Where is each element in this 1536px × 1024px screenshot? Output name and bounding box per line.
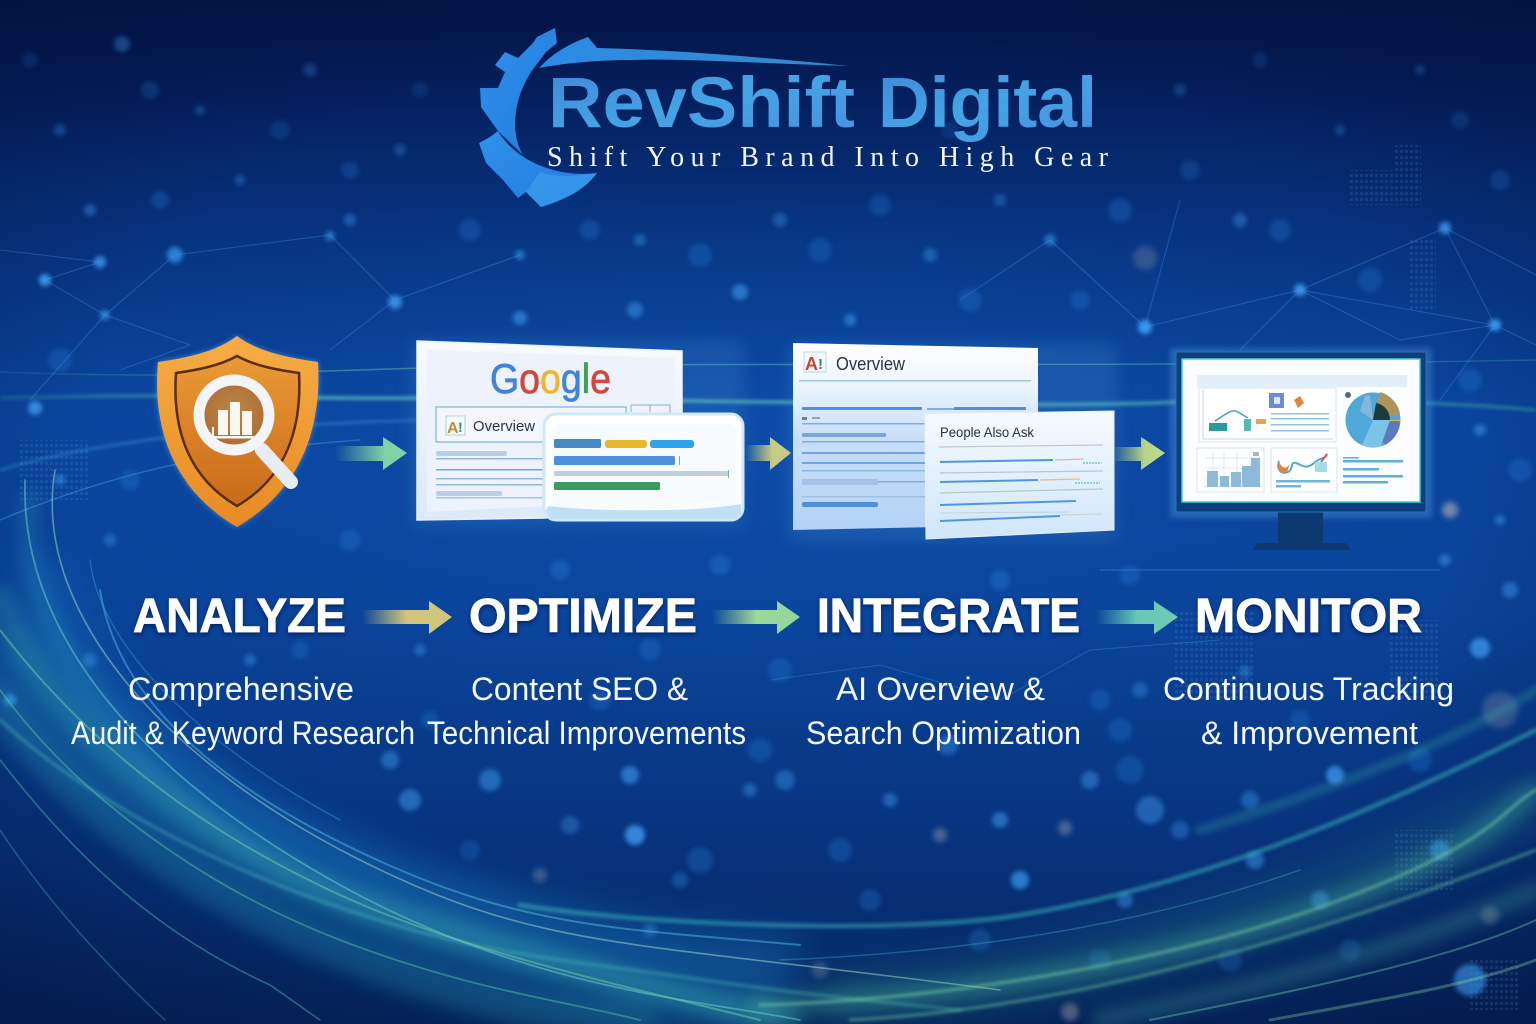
heading: OPTIMIZE: OPTIMIZE <box>469 590 697 643</box>
text block: analyze description: Audit & Keyword Research <box>71 715 415 751</box>
text placeholder lines <box>799 380 1031 507</box>
arrow: analyze to optimize illustration <box>335 437 407 470</box>
text block: integrate description <box>806 671 1081 751</box>
background: curved light swooshes, left <box>0 470 1000 1020</box>
background: horizontal light streaks <box>0 360 1536 570</box>
dashboard panel: text lines <box>1343 457 1403 484</box>
AI icon <box>804 352 826 374</box>
text block: integrate description: AI Overview & <box>836 671 1045 707</box>
dashboard panel: line chart <box>1199 388 1336 442</box>
AI icon <box>446 416 465 437</box>
logo tagline: Shift Your Brand Into High Gear <box>547 142 1109 173</box>
text block: monitor description <box>1163 671 1454 751</box>
text block: monitor description: Continuous Tracking <box>1163 671 1454 707</box>
dashboard header <box>1197 375 1407 387</box>
arrow: optimize to integrate <box>712 601 800 634</box>
AI icon: A <box>447 420 459 437</box>
Google wordmark: Google <box>490 355 611 402</box>
arrow: integrate to monitor illustration <box>1115 437 1165 470</box>
logo: RevShift Digital <box>479 28 1109 207</box>
panel: Google search results illustration <box>410 338 745 528</box>
Overview label: Overview <box>473 418 535 435</box>
dashboard panel: trend chart <box>1271 448 1337 492</box>
colored result bars <box>554 439 729 490</box>
text block: optimize description <box>427 671 746 751</box>
magnifier lens <box>199 380 269 450</box>
text block: analyze description <box>71 671 415 751</box>
monitor stand <box>1253 512 1351 550</box>
logo wordmark: Digital: Digital <box>878 64 1097 143</box>
text block: integrate description: Search Optimization <box>806 715 1081 751</box>
arrow: integrate to monitor <box>1096 601 1178 634</box>
logo wordmark: RevShift: RevShift <box>548 64 855 143</box>
bar chart in lens <box>212 402 254 438</box>
AI Overview box <box>436 407 626 442</box>
arrow: analyze to optimize <box>362 601 452 634</box>
question lines <box>939 445 1103 521</box>
AI icon: ! <box>458 419 463 435</box>
icon: analytics dashboard monitor <box>1170 348 1432 550</box>
heading: MONITOR: MONITOR <box>1195 590 1422 643</box>
magnifier handle <box>262 450 291 482</box>
arrow: optimize to integrate illustration <box>745 437 791 470</box>
text block: monitor description: & Improvement <box>1201 715 1418 751</box>
Overview title: Overview <box>836 354 906 374</box>
dashboard panel: pie chart <box>1345 392 1400 448</box>
heading: INTEGRATE: INTEGRATE <box>817 590 1080 643</box>
heading: ANALYZE: ANALYZE <box>133 590 346 643</box>
icon: orange shield with magnifier <box>157 336 318 527</box>
background: warm bokeh accents <box>533 246 1518 1021</box>
monitor screen <box>1182 359 1420 502</box>
People Also Ask card <box>925 411 1114 539</box>
People Also Ask title: People Also Ask <box>940 425 1034 440</box>
text block: optimize description: Content SEO & <box>471 671 688 707</box>
panel: AI Overview and People Also Ask illustration <box>788 342 1118 542</box>
text block: optimize description: Technical Improvements <box>427 715 746 751</box>
text placeholder lines <box>436 451 546 498</box>
overlay result card <box>544 414 743 520</box>
AI icon: ! <box>818 356 823 373</box>
AI icon: A <box>805 354 818 374</box>
monitor bezel <box>1176 352 1426 512</box>
background: curved light swooshes, right <box>520 690 1536 1020</box>
small window corner <box>631 405 670 414</box>
background: network lines <box>0 200 1536 700</box>
AI Overview card <box>793 343 1038 530</box>
logo icon: gear <box>479 28 597 207</box>
text block: analyze description: Comprehensive <box>128 671 354 707</box>
logo icon: speed swoosh <box>539 37 849 68</box>
Google results card <box>417 341 682 520</box>
dashboard panel: bar chart <box>1197 448 1264 492</box>
